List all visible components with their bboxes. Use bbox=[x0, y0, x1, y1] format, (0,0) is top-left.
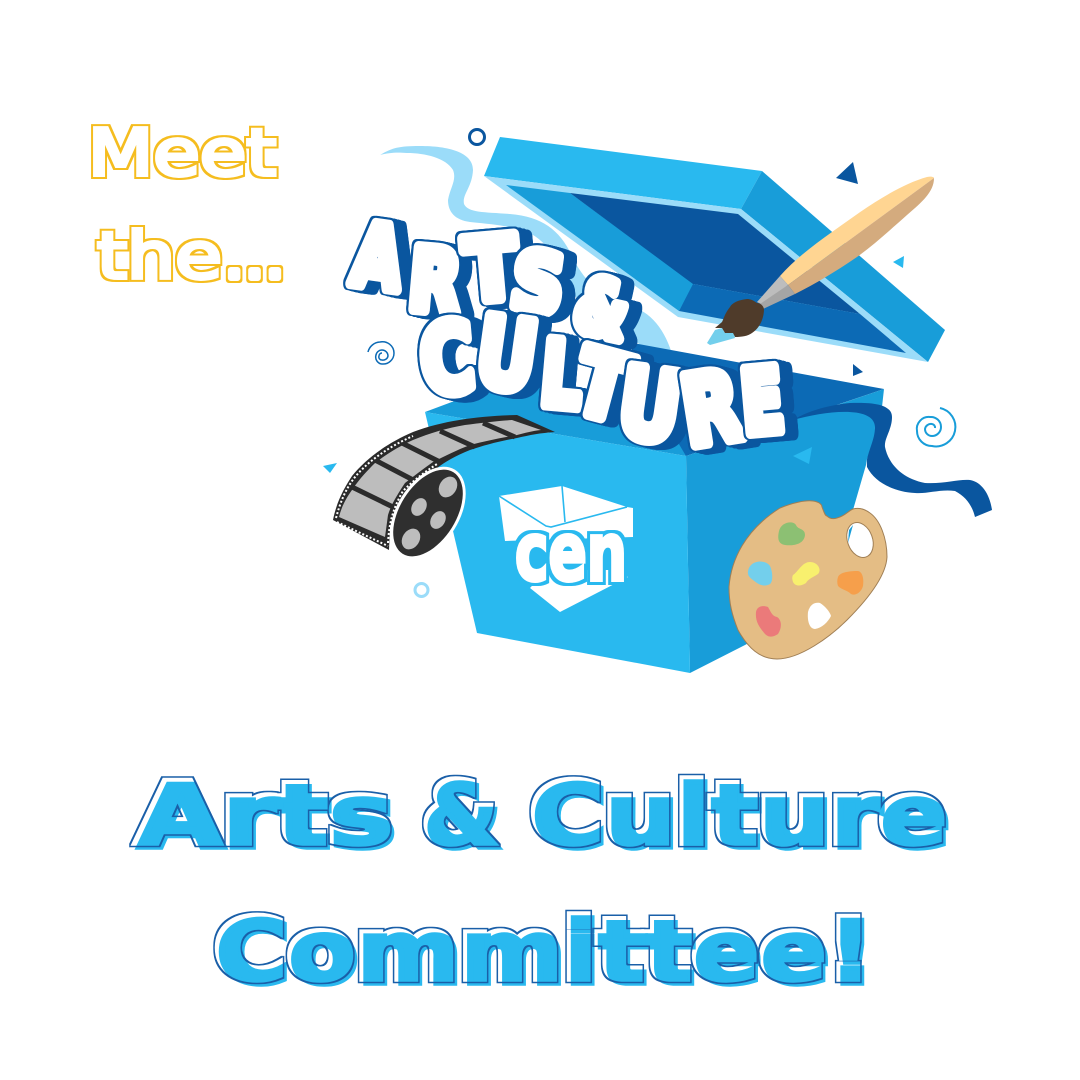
light swoosh bbox=[380, 146, 676, 372]
paint palette bbox=[729, 501, 887, 659]
heading: Arts & Culture Committee!: & bbox=[421, 764, 497, 864]
box back flap bbox=[620, 343, 884, 456]
cen logo bbox=[499, 486, 633, 612]
heading: Arts & Culture Committee!: Committee! bbox=[213, 900, 871, 1000]
heading: Arts & Culture Committee! bbox=[135, 764, 946, 1000]
heading: Meet the...: Meet bbox=[88, 117, 276, 191]
box right face bbox=[686, 412, 875, 673]
illustration title: ARTS & CULTURE bubble letters bbox=[346, 204, 788, 469]
decorative circles, triangles and spirals bbox=[323, 130, 955, 596]
heading: Arts & Culture Committee!: Arts bbox=[135, 764, 392, 864]
ribbon bbox=[793, 403, 992, 517]
illustration: open box bbox=[323, 130, 992, 673]
illustration title: ARTS & CULTURE bubble letters: L bbox=[537, 322, 587, 429]
illustration title: ARTS & CULTURE bubble letters: T bbox=[461, 218, 522, 322]
box front face bbox=[425, 412, 690, 673]
film reel bbox=[333, 415, 555, 573]
illustration title: ARTS & CULTURE bubble letters: R bbox=[674, 350, 749, 469]
illustration title: ARTS & CULTURE bubble letters: C bbox=[416, 302, 479, 418]
illustration title: ARTS & CULTURE bubble letters: U bbox=[612, 347, 687, 466]
illustration title: ARTS & CULTURE bubble letters: A bbox=[346, 204, 410, 310]
illustration title: ARTS & CULTURE bubble letters: & bbox=[566, 261, 637, 358]
illustration title: ARTS & CULTURE bubble letters: U bbox=[470, 297, 544, 415]
illustration title: ARTS & CULTURE bubble letters: T bbox=[564, 328, 641, 443]
heading: Meet the...: the bbox=[97, 220, 222, 294]
illustration title: ARTS & CULTURE bubble letters: R bbox=[405, 230, 465, 334]
box lid bbox=[484, 137, 945, 362]
heading: Arts & Culture Committee!: Culture bbox=[529, 764, 946, 864]
box left flap bbox=[425, 384, 686, 456]
heading: Meet the... bbox=[88, 117, 285, 294]
box right face triangle bbox=[793, 447, 812, 464]
cen logo: cen bbox=[515, 506, 627, 599]
illustration title: ARTS & CULTURE bubble letters: S bbox=[505, 233, 570, 335]
paint brush bbox=[707, 177, 934, 345]
heading: Meet the...: ... bbox=[224, 220, 285, 294]
illustration title: ARTS & CULTURE bubble letters: E bbox=[737, 349, 788, 454]
